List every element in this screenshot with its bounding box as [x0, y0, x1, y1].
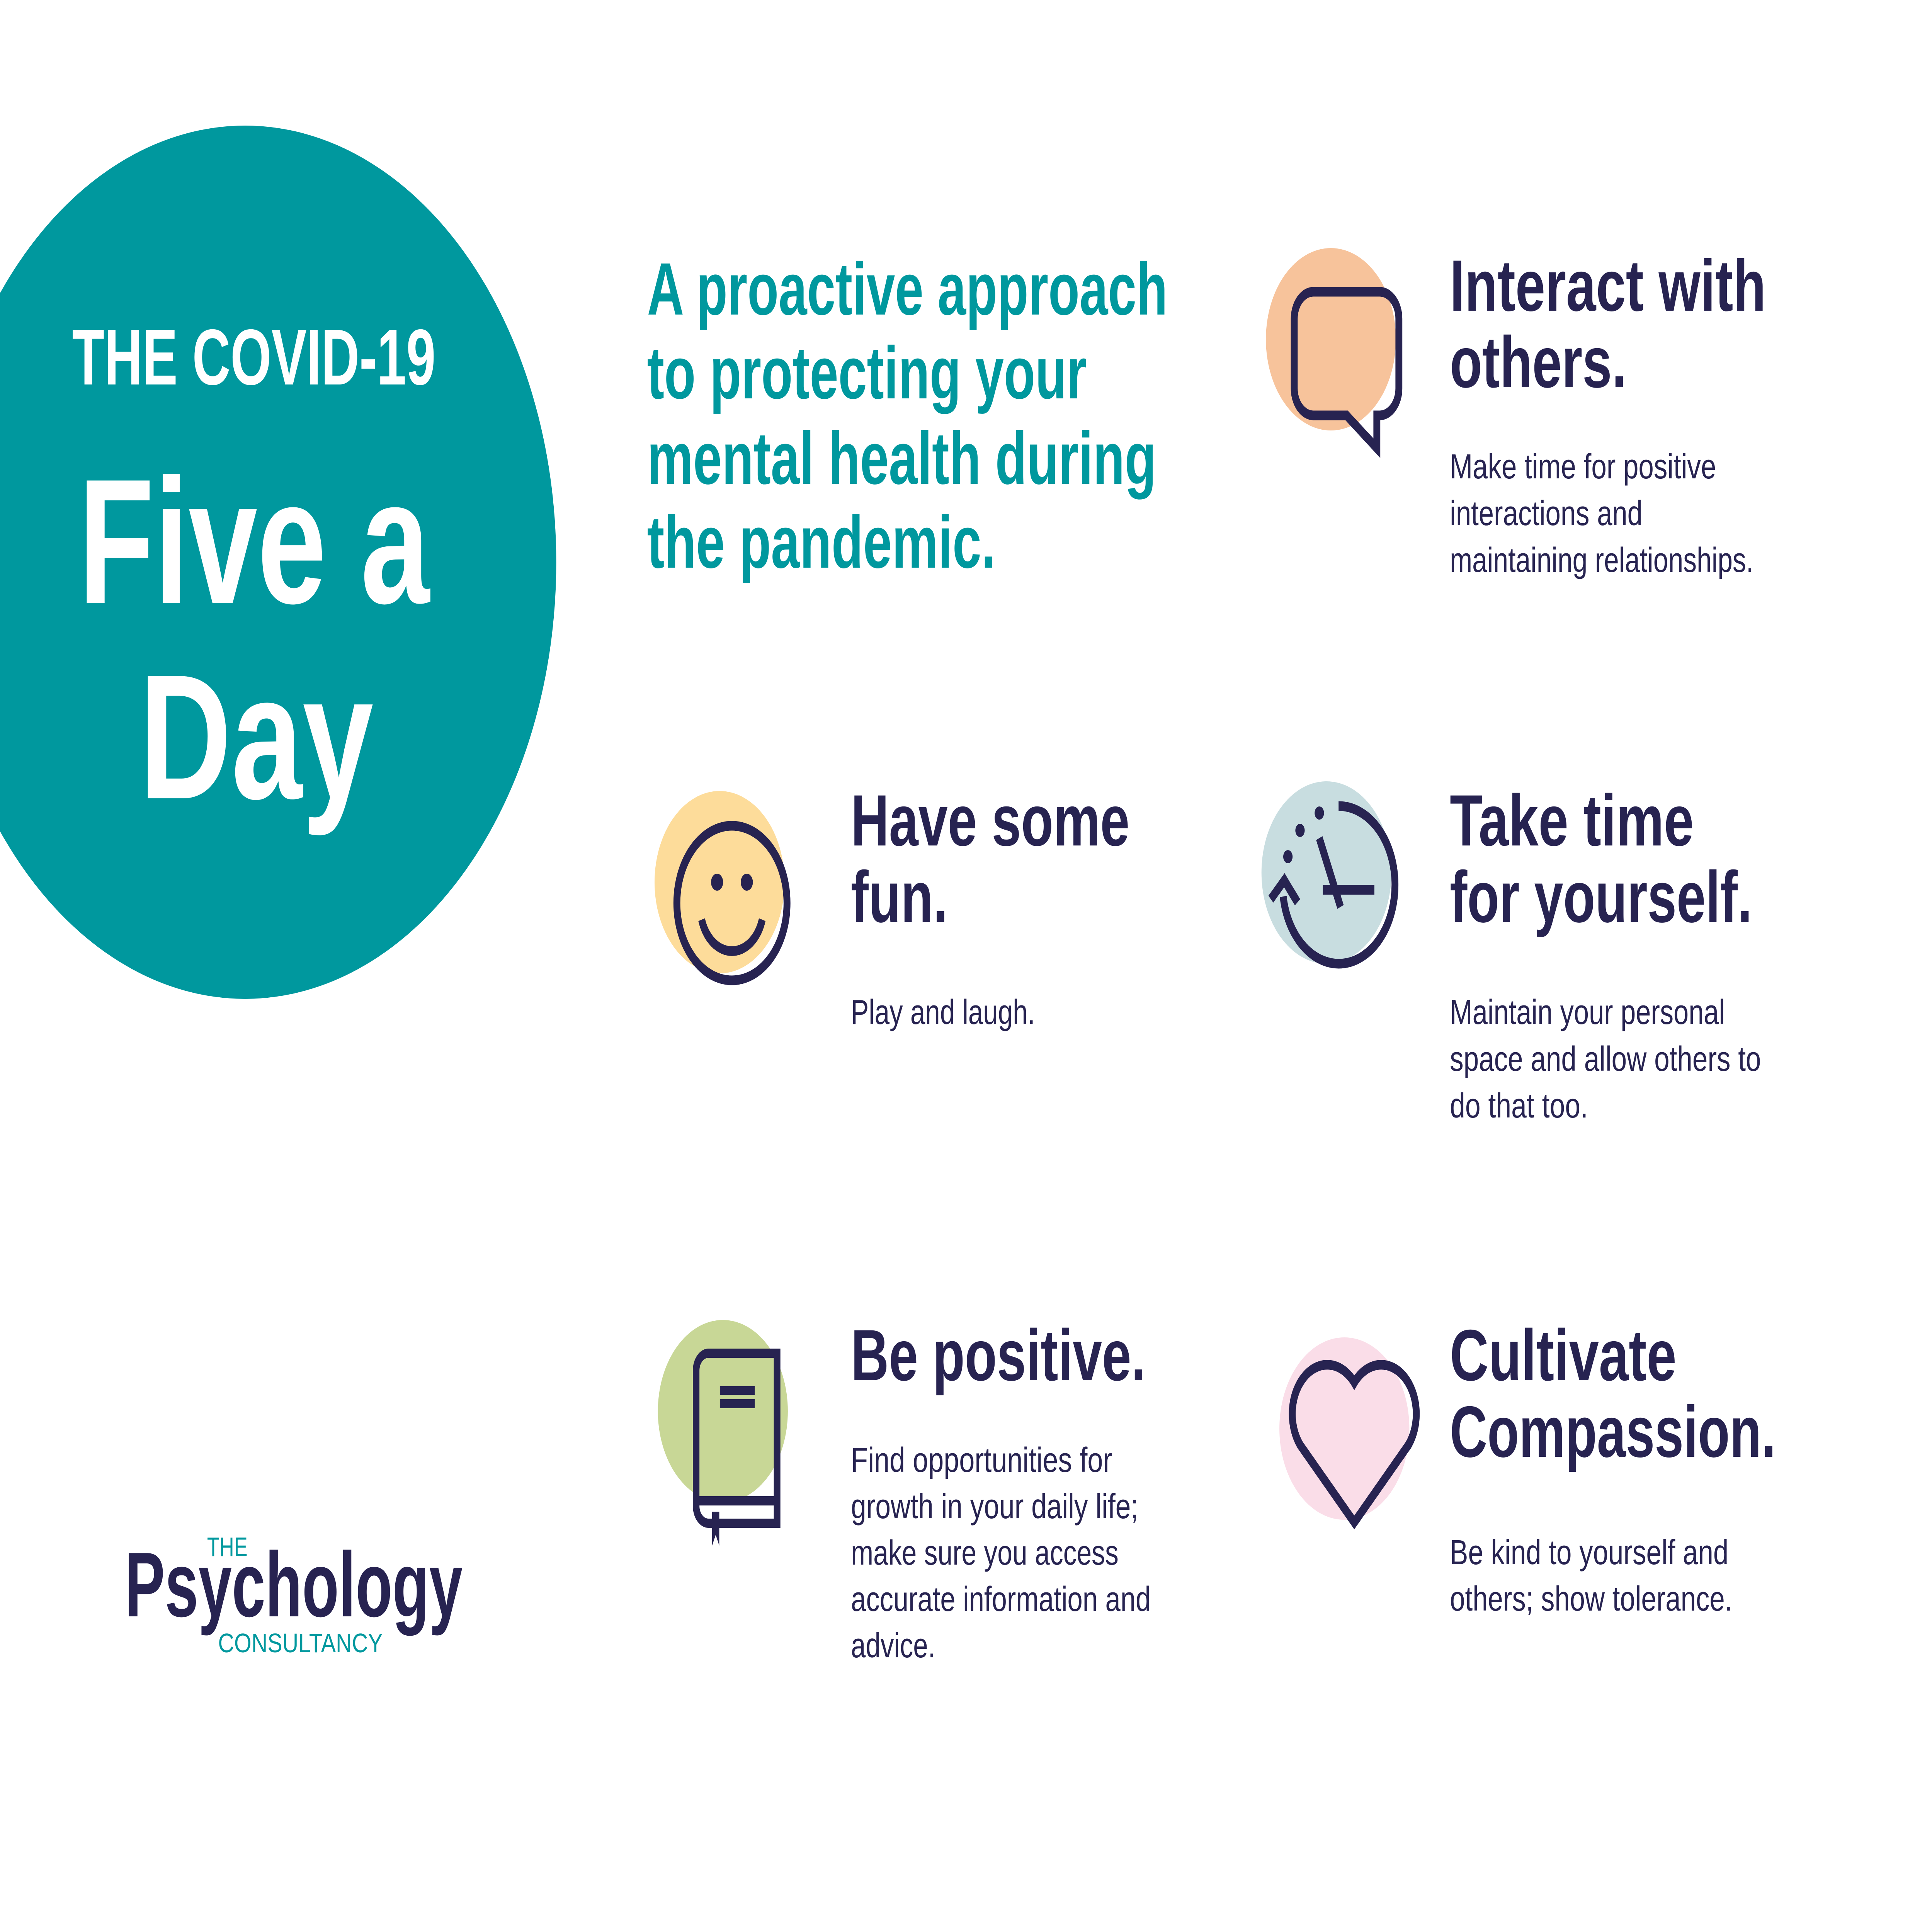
- title: Five a Day: [78, 442, 430, 837]
- body text: Make time for positive: [1450, 447, 1716, 486]
- body text: others; show tolerance.: [1450, 1579, 1732, 1618]
- panel: take time for yourself: [1262, 780, 1761, 1125]
- body text: [1450, 447, 1753, 580]
- heading: [851, 780, 1129, 937]
- icon: book: [658, 1320, 788, 1546]
- icon: heart: [1279, 1337, 1416, 1522]
- heading: for yourself.: [1450, 856, 1752, 937]
- body text: space and allow others to: [1450, 1039, 1761, 1078]
- heading: Be positive.: [851, 1315, 1146, 1396]
- logo: The Psychology Consultancy: THE: [207, 1532, 248, 1562]
- panel: be positive: [658, 1315, 1151, 1665]
- heading: Cultivate: [1450, 1315, 1677, 1396]
- body text: [1450, 1533, 1732, 1618]
- body text: accurate information and: [851, 1579, 1151, 1619]
- hero circle with title: [0, 126, 556, 999]
- heading: Interact with: [1450, 245, 1766, 326]
- heading: Have some: [851, 780, 1129, 861]
- heading: [1450, 1315, 1776, 1472]
- title: Five a Day: Five a: [78, 442, 430, 641]
- body text: Find opportunities for: [851, 1440, 1112, 1480]
- logo: The Psychology Consultancy: CONSULTANCY: [218, 1628, 383, 1658]
- intro headline: A proactive approach: [647, 248, 1168, 330]
- icon: smiley: [655, 791, 787, 980]
- heading: [1450, 245, 1766, 403]
- body text: make sure you access: [851, 1533, 1119, 1572]
- heading: fun.: [851, 856, 948, 937]
- title: Five a Day: Day: [139, 637, 374, 837]
- logo: The Psychology Consultancy: Psychology: [125, 1533, 463, 1636]
- intro headline: to protecting your: [647, 332, 1087, 414]
- body text: do that too.: [1450, 1086, 1588, 1125]
- heading: Compassion.: [1450, 1391, 1776, 1472]
- body text: [1450, 992, 1761, 1125]
- intro headline: [647, 248, 1168, 583]
- heading: [1450, 780, 1752, 937]
- body text: Maintain your personal: [1450, 992, 1725, 1032]
- intro headline: mental health during: [647, 417, 1156, 500]
- heading: Take time: [1450, 780, 1694, 861]
- body text: Be kind to yourself and: [1450, 1533, 1728, 1572]
- panel: interact with others: [1266, 245, 1766, 580]
- subtitle: THE COVID-19: THE COVID-19: [72, 313, 435, 401]
- icon: speech bubble: [1266, 248, 1399, 448]
- body text: interactions and: [1450, 493, 1643, 533]
- body text: [851, 1440, 1151, 1665]
- panel: cultivate compassion: [1279, 1315, 1776, 1618]
- body text: Play and laugh.: [851, 992, 1035, 1032]
- body text: advice.: [851, 1626, 935, 1665]
- body text: maintaining relationships.: [1450, 540, 1753, 580]
- panel: have some fun: [655, 780, 1129, 1032]
- body text: growth in your daily life;: [851, 1487, 1138, 1526]
- icon: clock: [1262, 781, 1395, 964]
- intro headline: the pandemic.: [647, 501, 996, 583]
- heading: others.: [1450, 321, 1627, 403]
